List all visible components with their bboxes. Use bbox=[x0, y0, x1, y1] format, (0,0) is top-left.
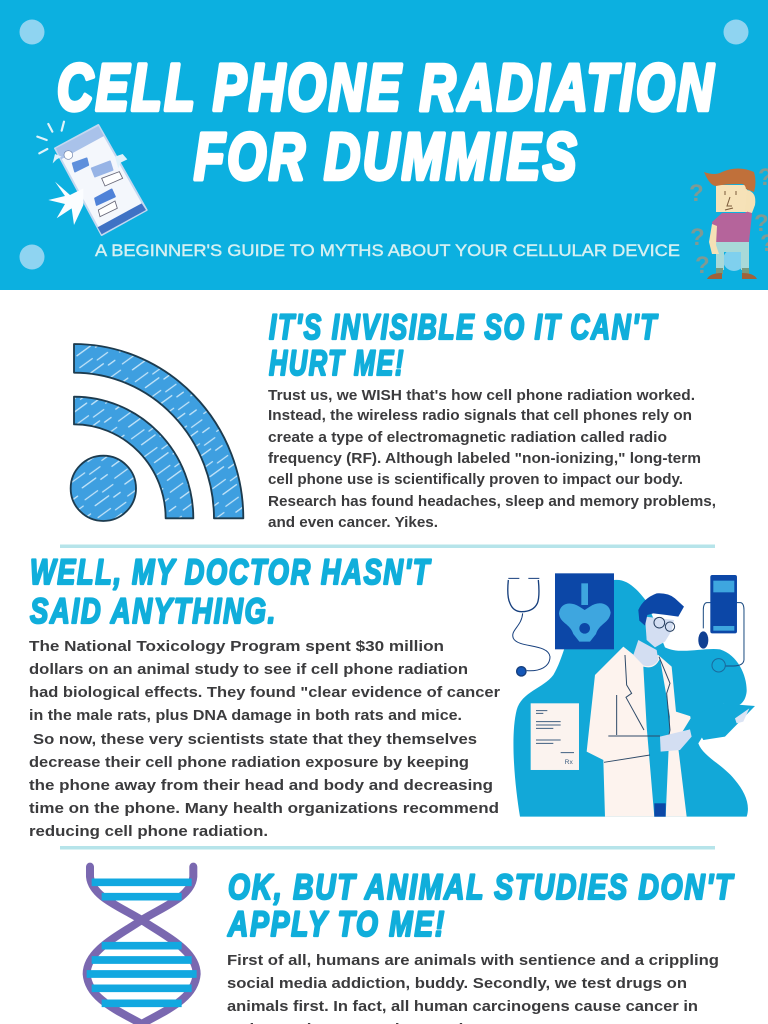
body text: and even cancer. Yikes. bbox=[268, 515, 438, 531]
body text: Trust us, we WISH that's how cell phone radiation worked. bbox=[268, 388, 695, 404]
section: my doctor bbox=[29, 553, 755, 840]
subtitle: A BEGINNER'S GUIDE TO MYTHS ABOUT YOUR CELLULAR DEVICE bbox=[95, 241, 680, 260]
icon: DNA helix bbox=[87, 867, 197, 1024]
icon: wifi signal bbox=[71, 344, 243, 521]
body text: dollars on an animal study to see if cell phone radiation bbox=[29, 662, 468, 678]
heading bbox=[227, 868, 734, 944]
header banner bbox=[0, 0, 768, 290]
heading: HURT ME! bbox=[269, 344, 405, 383]
icon: smartphone with sparkle bbox=[37, 122, 147, 235]
heading: WELL, MY DOCTOR HASN'T bbox=[30, 553, 431, 592]
heading bbox=[269, 308, 658, 383]
illustration: doctor bbox=[508, 573, 755, 817]
divider bbox=[60, 544, 715, 548]
body text: had biological effects. They found "clear evidence of cancer bbox=[29, 685, 500, 701]
body text: create a type of electromagnetic radiation called radio bbox=[268, 430, 667, 446]
body text: social media addiction, buddy. Secondly, we test drugs on bbox=[227, 976, 687, 992]
body text: the phone away from their head and body and decreasing bbox=[29, 778, 493, 794]
section: it's invisible bbox=[71, 308, 716, 531]
icon: confused man bbox=[689, 164, 768, 279]
decorative circle bottom left bbox=[20, 244, 44, 270]
title bbox=[57, 50, 716, 193]
body text: in the male rats, plus DNA damage in both rats and mice. bbox=[29, 708, 462, 724]
body text: time on the phone. Many health organizations recommend bbox=[29, 801, 499, 817]
body text: First of all, humans are animals with sentience and a crippling bbox=[227, 953, 719, 969]
heading bbox=[30, 553, 431, 631]
body text: Research has found headaches, sleep and memory problems, bbox=[268, 494, 716, 510]
body text bbox=[268, 388, 716, 531]
body text: cell phone use is scientifically proven to impact our body. bbox=[268, 472, 683, 488]
decorative circle top right bbox=[724, 20, 748, 44]
body text: frequency (RF). Although labeled "non-ionizing," long-term bbox=[268, 451, 701, 467]
body text: Instead, the wireless radio signals that cell phones rely on bbox=[268, 408, 692, 424]
heading: SAID ANYTHING. bbox=[30, 592, 277, 631]
doctor figure bbox=[587, 593, 755, 817]
body text: animals first. In fact, all human carcinogens cause cancer in bbox=[227, 999, 698, 1015]
icon: confused man: ? bbox=[689, 180, 704, 207]
decorative circle top left bbox=[20, 20, 44, 44]
body text bbox=[227, 953, 719, 1024]
background blob bbox=[513, 580, 748, 817]
blood pressure monitor bbox=[698, 575, 744, 672]
body text: The National Toxicology Program spent $30 million bbox=[29, 639, 444, 655]
section: animal studies bbox=[87, 867, 734, 1024]
icon: confused man: ? bbox=[695, 252, 710, 279]
stethoscope bbox=[508, 578, 550, 676]
prescription paper bbox=[531, 703, 579, 770]
heading: APPLY TO ME! bbox=[227, 905, 446, 944]
prescription paper: Rx bbox=[565, 759, 573, 766]
body text bbox=[29, 639, 500, 840]
icon: confused man: ? bbox=[690, 224, 705, 251]
divider bbox=[60, 846, 715, 850]
body text: reducing cell phone radiation. bbox=[29, 824, 268, 840]
title: FOR DUMMIES bbox=[194, 119, 579, 193]
body text: decrease their cell phone radiation exposure by keeping bbox=[29, 755, 469, 771]
body text: So now, these very scientists state that they themselves bbox=[33, 732, 477, 748]
x-ray bbox=[555, 573, 614, 649]
